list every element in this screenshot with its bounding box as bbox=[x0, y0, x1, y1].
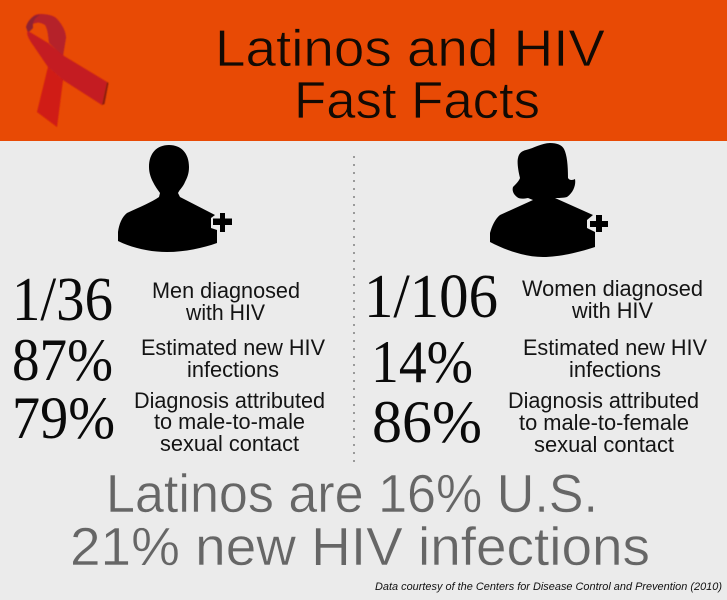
summary statement: 21% new HIV infections bbox=[70, 517, 650, 577]
icon: woman with plus bbox=[490, 143, 608, 257]
stat: 79% male-to-male bbox=[12, 385, 325, 456]
stat: 86% male-to-female: Diagnosis attributed bbox=[508, 388, 699, 413]
stat: 1/36 men diagnosed: with HIV bbox=[185, 300, 265, 325]
stat: 1/106 women diagnosed bbox=[364, 263, 703, 331]
stat: 87% estimated new infections bbox=[12, 327, 325, 393]
stat: 86% male-to-female: sexual contact bbox=[534, 432, 674, 457]
stat: 14% estimated new infections: 14% bbox=[371, 329, 473, 395]
stat: 1/36 men diagnosed: 1/36 bbox=[12, 266, 113, 334]
stat: 87% estimated new infections: 87% bbox=[12, 327, 113, 393]
icon: man with plus bbox=[118, 145, 232, 252]
stat: 1/36 men diagnosed: Men diagnosed bbox=[152, 278, 300, 303]
stat: 79% male-to-male: Diagnosis attributed bbox=[134, 388, 325, 413]
panel: men statistics bbox=[12, 266, 325, 456]
stat: 87% estimated new infections: Estimated new HIV bbox=[141, 335, 325, 360]
summary statement bbox=[70, 464, 650, 577]
stat: 86% male-to-female bbox=[372, 388, 699, 457]
divider bbox=[353, 156, 355, 462]
stat: 86% male-to-female: 86% bbox=[372, 389, 482, 455]
title bbox=[215, 20, 605, 130]
stat: 1/106 women diagnosed: Women diagnosed bbox=[522, 276, 703, 301]
header band bbox=[0, 0, 727, 141]
stat: 79% male-to-male: to male-to-male bbox=[154, 409, 305, 434]
stat: 14% estimated new infections bbox=[371, 329, 707, 395]
title: Latinos and HIV bbox=[215, 20, 605, 78]
stat: 14% estimated new infections: Estimated new HIV bbox=[523, 335, 707, 360]
stat: 86% male-to-female: to male-to-female bbox=[519, 410, 689, 435]
stat: 1/36 men diagnosed bbox=[12, 266, 300, 334]
stat: 79% male-to-male: sexual contact bbox=[160, 431, 299, 456]
title: Fast Facts bbox=[294, 72, 540, 130]
stat: 14% estimated new infections: infections bbox=[569, 357, 661, 382]
stat: 79% male-to-male: 79% bbox=[12, 385, 115, 451]
stat: 1/106 women diagnosed: 1/106 bbox=[364, 263, 498, 331]
source credit: Data courtesy of the Centers for Disease Control and Prevention (2010) bbox=[375, 581, 722, 593]
summary statement: Latinos are 16% U.S. bbox=[106, 464, 598, 524]
icon: red ribbon bbox=[26, 14, 108, 127]
stat: 1/106 women diagnosed: with HIV bbox=[571, 298, 653, 323]
panel: women statistics bbox=[364, 263, 707, 457]
stat: 87% estimated new infections: infections bbox=[187, 357, 279, 382]
